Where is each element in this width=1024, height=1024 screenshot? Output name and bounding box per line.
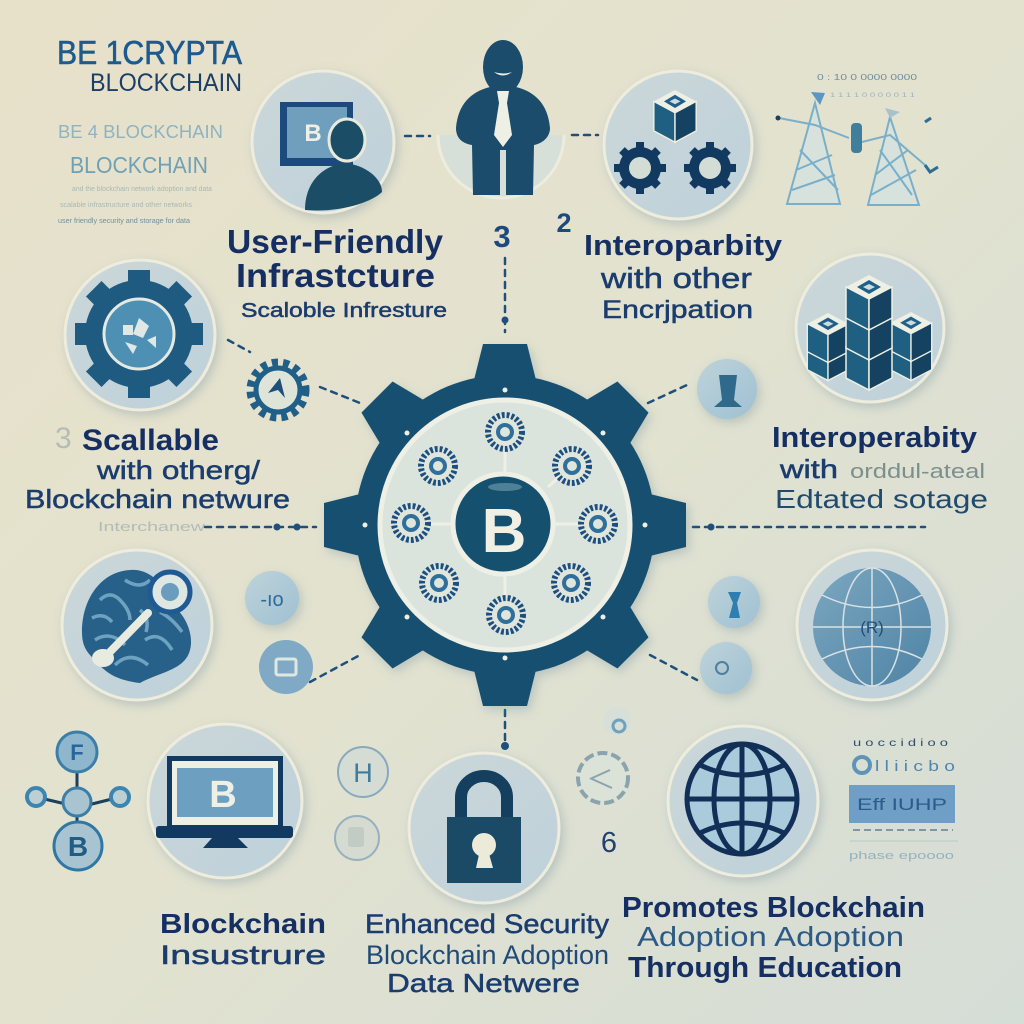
title block: BE 1CRYPTA <box>57 34 242 71</box>
text: interoperability with other encryption: Encrjpation <box>602 296 753 324</box>
title block: and the blockchain network adoption and data <box>72 186 212 193</box>
icon: right gear <box>684 142 736 194</box>
text: promotes blockchain adoption: Adoption Adoption <box>637 921 904 952</box>
numbers: 3 and 2: 3 <box>493 219 511 254</box>
panel: gears and cube <box>604 71 752 219</box>
title block: BE 4 BLOCKCHAIN <box>58 122 223 142</box>
title block <box>57 34 242 225</box>
icons: small gear badges <box>578 707 631 803</box>
text: promotes blockchain adoption: Through Education <box>628 952 902 984</box>
text: interoperability with storage: orddul-ateal <box>850 461 985 483</box>
text: interoperability with storage: Edtated sotage <box>775 484 988 514</box>
title block: user friendly security and storage for data <box>58 218 190 225</box>
text: promotes blockchain adoption: Promotes Blockchain <box>622 892 925 924</box>
legend: faint data card: Eff IUHP <box>857 795 947 814</box>
main gear <box>324 344 686 706</box>
text: blockchain infrastructure: Blockchain <box>160 908 326 939</box>
icon: left gear <box>614 142 666 194</box>
icon: network nodes: B <box>68 831 88 862</box>
icons: small badges right <box>700 576 760 694</box>
icons: small faint badges <box>335 747 388 860</box>
icons: small faint badges: H <box>353 758 373 788</box>
icon: small badge right <box>697 359 757 419</box>
text: user-friendly infrastructure <box>227 223 447 322</box>
text: enhanced security: Blockchain Adoption <box>366 940 609 970</box>
connector dashes <box>205 135 925 750</box>
text: scalable: Scallable <box>82 424 219 457</box>
panel: user at monitor <box>252 71 394 213</box>
icons: small badges left <box>245 571 313 694</box>
center hub with letter B: B <box>482 497 526 566</box>
text: interoperability with storage: with <box>779 454 838 484</box>
title block: scalable infrastructure and other networks <box>60 202 192 209</box>
panel: user at monitor: B <box>304 120 322 147</box>
text: user-friendly infrastructure: Scaloble Infresture <box>241 300 447 322</box>
text: interoperability with storage <box>772 422 988 514</box>
title block: BLOCKCHAIN <box>70 152 208 178</box>
text: enhanced security: Data Netwere <box>387 968 580 998</box>
text: interoperability with other encryption <box>584 230 782 324</box>
text: blockchain infrastructure <box>160 908 326 970</box>
title block: BLOCKCHAIN <box>90 69 242 97</box>
legend: faint data card: phase epoooo <box>849 850 954 862</box>
panel: stacked blocks <box>796 254 944 402</box>
panel: globe with shield: (R) <box>860 618 884 637</box>
icon: transmission towers: 0 : 10 0 0000 0000 <box>817 73 918 82</box>
panel: circuit gear <box>65 260 215 410</box>
text: scalable: Interchanew <box>98 519 206 534</box>
text: scalable: 3 <box>55 422 72 455</box>
text: enhanced security: Enhanced Security <box>365 909 610 939</box>
legend: faint data card <box>849 738 958 862</box>
icon: network nodes <box>27 732 129 870</box>
icon: network nodes: F <box>70 740 84 765</box>
icon: transmission towers: 1 1 1 1 0 0 0 0 0 1 1 <box>830 93 916 99</box>
center hub with letter B <box>453 474 553 574</box>
icon: small gear left <box>251 363 305 417</box>
legend: faint data card: l l i i c b o <box>875 758 955 775</box>
text: promotes blockchain adoption <box>622 892 925 984</box>
panel: monitor: B <box>209 774 237 816</box>
panel: globe with shield <box>797 550 947 700</box>
text: interoperability with other encryption: Interoparbity <box>584 230 782 262</box>
text: user-friendly infrastructure: User-Friendly <box>227 223 444 260</box>
panel: person with tie <box>438 40 564 198</box>
text: scalable: with otherg/ <box>96 455 261 485</box>
text: blockchain infrastructure: Insustrure <box>160 940 326 970</box>
icon: transmission towers <box>776 73 938 205</box>
text: scalable <box>25 422 290 534</box>
numbers: 3 and 2: 2 <box>556 208 572 238</box>
small cogs ring <box>394 415 615 632</box>
text: interoperability with other encryption: with other <box>600 263 752 295</box>
panel: magnifier over network <box>62 550 212 700</box>
number 6: 6 <box>601 827 617 859</box>
panel: padlock <box>409 753 559 903</box>
panel: wireframe globe <box>668 726 818 876</box>
numbers: 3 and 2 <box>493 208 572 254</box>
legend: faint data card: u o c c i d i o o <box>853 738 949 749</box>
text: scalable: Blockchain netwure <box>25 484 290 514</box>
text: interoperability with storage: Interoperabity <box>772 422 977 454</box>
icons: small badges left: -ıo <box>260 589 284 611</box>
panel: monitor <box>148 724 302 878</box>
text: user-friendly infrastructure: Infrastcture <box>236 257 435 294</box>
text: enhanced security <box>365 909 610 998</box>
